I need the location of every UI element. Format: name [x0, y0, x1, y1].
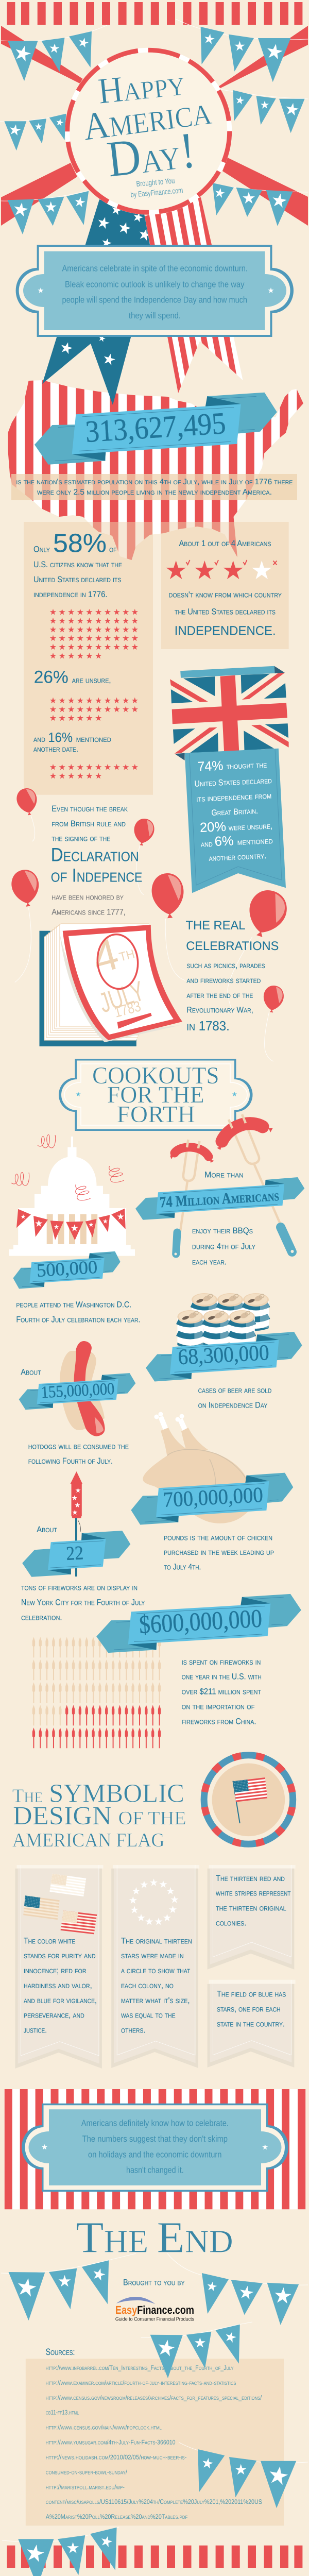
58 percent text: 58%: [53, 529, 107, 558]
26 percent text: 26%: [34, 668, 68, 687]
sources heading: Sources:: [46, 2347, 75, 2357]
star chart 58: [50, 609, 138, 659]
cookouts heading: [92, 1062, 219, 1127]
banner text: United States declared: [194, 776, 272, 789]
banner text: 6%: [214, 833, 234, 849]
symbolic design heading: DESIGN: [13, 1802, 112, 1831]
fireworks text: celebration.: [21, 1613, 62, 1622]
banner text: thought the: [226, 760, 267, 771]
washington text: [16, 1300, 141, 1325]
symbolic design heading: SYMBOLIC: [49, 1780, 184, 1808]
real celebrations text: CELEBRATIONS: [186, 939, 279, 953]
symbolic design heading: [12, 1780, 186, 1851]
calendar date: 4: [87, 929, 124, 983]
color meanings text: and blue for vigilance,: [24, 1996, 97, 2005]
source links: http://www.examiner.com/article/fourth-of-july-interesting-facts-and-statistics: [46, 2379, 236, 2386]
calendar date: 1783: [113, 998, 143, 1021]
turkey: [143, 1412, 252, 1523]
color meanings text: [24, 1937, 97, 2035]
title text: HAPPY: [96, 63, 187, 112]
brought to you: by EasyFinance.com: [130, 186, 183, 199]
panel: 1 out of 4: INDEPENDENCE.: [175, 624, 276, 638]
closing bunting: [1, 2253, 308, 2338]
16 percent text: 16%: [48, 730, 73, 745]
three flags: [23, 1874, 97, 1934]
source links: content/misc/usapolls/US110615/July%204th/Complete%20July%201,%202011%20US: [46, 2498, 262, 2505]
banner text: [194, 758, 273, 863]
source links: consumed-on-super-bowl-sunday/: [46, 2468, 127, 2476]
$600,000,000 ribbon: [95, 1593, 303, 1654]
color meanings text: innocence; red for: [24, 1966, 87, 1975]
title badge: [65, 48, 232, 215]
banner: field of blue: [208, 1980, 296, 2067]
bbq text: [192, 1226, 255, 1266]
source links: http://www.census.gov/newsroom/releases/archives/facts_for_features_special_editions/: [46, 2394, 262, 2401]
155,000,000 ribbon: 155,000,000: [41, 1380, 115, 1402]
source links: A%20Marist%20Poll%20Release%20and%20Tables.pdf: [46, 2513, 188, 2520]
striped map of the USA: [8, 380, 303, 560]
16 percent text: mentioned: [76, 735, 111, 744]
banner: color meanings: [15, 1865, 103, 2069]
thirteen stripes text: the thirteen original: [216, 1904, 286, 1913]
hotdog text: hotdogs will be consumed the: [28, 1442, 129, 1451]
bottom bunting: [2, 2443, 308, 2576]
declaration text: of Indepence: [51, 865, 142, 886]
chicken text: purchased in the week leading up: [164, 1548, 274, 1557]
16 percent text: [33, 730, 111, 754]
capitol building: [9, 1134, 135, 1256]
brought to you: Brought to You: [136, 177, 175, 189]
beer text: [198, 1385, 272, 1410]
fireworks spending text: over $211 million spent: [182, 1687, 262, 1697]
star rating: [166, 560, 277, 579]
fireworks spending text: is spent on fireworks in: [182, 1657, 261, 1667]
washington text: people attend the Washington D.C.: [16, 1300, 131, 1310]
blue star ribbon tail: [42, 199, 152, 405]
color meanings text: justice.: [24, 2026, 47, 2035]
panel: 1 out of 4: doesn't know from which country: [169, 590, 282, 599]
EasyFinance logo: [115, 2297, 194, 2322]
calendar date: JULY: [95, 975, 148, 1019]
panel: 1 out of 4: About 1 out of 4 Americans: [179, 539, 271, 548]
source links: http://www.census.gov/main/www/popclock.html: [46, 2424, 162, 2431]
declaration text: have been honored by: [52, 893, 124, 902]
banner text: its independence from: [196, 791, 272, 804]
cookouts heading: FORTH: [117, 1101, 195, 1127]
real celebrations text: such as picnics, parades: [186, 961, 265, 970]
original stars text: others.: [121, 2026, 145, 2035]
source links: http://maristpoll.marist.edu/wp-: [46, 2483, 125, 2490]
chicken text: pounds is the amount of chicken: [164, 1533, 272, 1542]
26 percent text: are unsure,: [72, 676, 111, 685]
16 percent text: and: [33, 735, 45, 744]
field of blue text: stars, one for each: [217, 2004, 281, 2013]
color meanings text: perseverance, and: [24, 2011, 84, 2020]
intro text: Bleak economic outlook is unlikely to change the way: [65, 279, 245, 289]
population ribbon: [32, 392, 279, 466]
intro text: people will spend the Independence Day and how much: [62, 295, 247, 305]
source links: cb11-ff13.html: [46, 2409, 79, 2416]
cookouts heading: COOKOUTS: [92, 1062, 219, 1089]
fireworks spending text: one year in the U.S. with: [182, 1672, 262, 1682]
beer text: cases of beer are sold: [198, 1385, 272, 1395]
calendar date: [87, 929, 148, 1021]
cookouts heading box: [59, 1059, 252, 1131]
about text (fireworks): About: [37, 1525, 58, 1534]
hotdog text: [28, 1442, 129, 1466]
closing striped band: [5, 2089, 305, 2209]
symbolic design heading: AMERICAN FLAG: [12, 1829, 165, 1851]
$600,000,000 ribbon: $600,000,000: [139, 1604, 263, 1639]
beer cans: [177, 1293, 269, 1348]
68,300,000 ribbon: 68,300,000: [177, 1341, 270, 1369]
real celebrations text: and fireworks started: [186, 976, 261, 985]
hanging blue banner: [185, 749, 286, 893]
closing box: [22, 2104, 288, 2192]
original stars text: The original thirteen: [121, 1937, 192, 1946]
fireworks text: New York City for the Fourth of July: [21, 1598, 145, 1607]
source links: http://news.holidash.com/2010/02/05/how-much-beer-is-: [46, 2453, 186, 2461]
declaration text: from British rule and: [52, 819, 126, 828]
beer text: on Independence Day: [198, 1400, 267, 1410]
declaration text: Americans since 1777,: [52, 908, 126, 917]
population text band: were only 2.5 million people living in the newly independent America.: [37, 488, 272, 497]
closing text: Americans definitely know how to celebrate.: [81, 2119, 229, 2128]
symbolic design heading: OF THE: [118, 1808, 186, 1829]
fireworks text: [21, 1583, 145, 1622]
star chart 16: [50, 764, 138, 779]
banner text: and: [200, 839, 213, 849]
real celebrations text: Revolutionary War,: [186, 1006, 253, 1015]
panel: 58 percent: [24, 522, 153, 795]
original stars text: stars were made in: [121, 1951, 184, 1960]
bbq text: enjoy their BBQs: [192, 1226, 253, 1235]
banner text: Great Britain.: [211, 806, 258, 818]
22 ribbon: [22, 1531, 130, 1577]
thirteen stripes text: [216, 1874, 291, 1927]
us flag on pole: [233, 1777, 267, 1823]
symbolic design heading: THE: [12, 1786, 43, 1807]
population ribbon: 313,627,495: [84, 406, 227, 449]
original stars text: matter what it's size,: [121, 1996, 190, 2005]
color meanings text: stands for purity and: [24, 1951, 96, 1960]
panel: 1 out of 4: [161, 522, 289, 649]
flag badge: [204, 1755, 293, 1844]
original stars text: each colony, no: [121, 1981, 174, 1990]
source links: [46, 2364, 262, 2520]
panel: 1 out of 4: the United States declared its: [175, 607, 276, 617]
74 million ribbon: 74 Million Americans: [159, 1187, 280, 1211]
hotdog: [60, 1341, 105, 1436]
58 percent text: independence in 1776.: [33, 590, 108, 599]
bottom stripes: [7, 2546, 302, 2568]
balloons: [10, 787, 291, 1061]
fireworks spending text: on the importation of: [182, 1702, 254, 1711]
bbq text: during 4th of July: [192, 1242, 255, 1251]
population text band: is the nation's estimated population on this 4th of July, while in July of 1776 there: [16, 478, 293, 486]
field of blue text: state in the country.: [217, 2019, 285, 2028]
color meanings text: The color white: [24, 1937, 75, 1946]
banner text: 74%: [197, 758, 224, 774]
16 percent text: another date.: [33, 744, 78, 754]
declaration text: [51, 804, 142, 917]
rocket pictogram chart: [32, 1637, 161, 1748]
thirteen stripes text: colonies.: [216, 1918, 246, 1927]
grill forks with sausages: [170, 1114, 294, 1255]
fireworks text: tons of fireworks are on display in: [21, 1583, 138, 1592]
washington text: Fourth of July celebration each year.: [16, 1315, 141, 1325]
banner text: another country.: [209, 851, 266, 863]
58 percent text: U.S. citizens know that the: [33, 560, 122, 569]
union jack flag: [170, 666, 289, 760]
closing text: on holidays and the economic downturn: [88, 2149, 221, 2159]
calendar date: TH: [118, 947, 136, 964]
real celebrations text: after the end of the: [186, 991, 253, 1000]
real celebrations text: in 1783.: [186, 1018, 230, 1033]
confetti: [11, 1134, 124, 1202]
500,000 ribbon: 500,000: [36, 1257, 98, 1281]
EasyFinance logo: Guide to Consumer Financial Products: [115, 2316, 194, 2322]
real celebrations text: [185, 919, 279, 1033]
700,000,000 ribbon: [130, 1472, 295, 1526]
bunting over sources: [150, 2325, 240, 2378]
declaration text: the signing of the: [52, 834, 110, 843]
intro text: Americans celebrate in spite of the economic downturn.: [62, 264, 248, 274]
intro text: they will spend.: [129, 311, 181, 320]
star chart 26: [50, 698, 138, 721]
22 ribbon: 22: [65, 1542, 84, 1565]
700,000,000 ribbon: 700,000,000: [163, 1483, 264, 1512]
top stripes: [7, 2, 302, 25]
thirteen stripes text: The thirteen red and: [216, 1874, 285, 1883]
title text: AMERICA: [80, 89, 214, 149]
155,000,000 ribbon: [18, 1372, 136, 1410]
banner text: mentioned: [237, 836, 273, 847]
banner text: 20%: [199, 819, 227, 835]
thirteen stripes text: white stripes represent: [216, 1889, 291, 1898]
closing text: hasn't changed it.: [126, 2165, 184, 2175]
intro text: [62, 264, 248, 320]
500,000 ribbon: [12, 1251, 122, 1289]
real celebrations text: THE REAL: [185, 919, 245, 933]
more than text: More than: [204, 1171, 244, 1180]
cookouts heading: FOR THE: [107, 1081, 204, 1108]
red sun rays: [1, 26, 308, 226]
sources panel: [26, 2359, 284, 2526]
field of blue text: [217, 1990, 286, 2028]
58 percent text: of: [109, 545, 116, 554]
bunting: top left, top right, mid, lower: [0, 19, 308, 234]
original stars text: was equal to the: [121, 2011, 176, 2020]
original stars text: [121, 1937, 192, 2035]
original stars text: a circle to show that: [121, 1966, 191, 1975]
about text (hotdogs): About: [21, 1367, 41, 1377]
source links: http://www.yumsugar.com/4th-July-Fun-Facts-366010: [46, 2439, 176, 2446]
capitol bunting: [16, 1209, 126, 1240]
field of blue text: The field of blue has: [217, 1990, 286, 1999]
banner: thirteen stripes: [208, 1865, 296, 1970]
firework rocket: [71, 1471, 82, 1577]
banner: original stars: [111, 1865, 199, 2068]
title text: [80, 63, 214, 188]
color meanings text: hardiness and valor,: [24, 1981, 92, 1990]
intro box: [16, 245, 294, 337]
brought to you by: Brought to you by: [123, 2278, 185, 2287]
sausages: [170, 1114, 273, 1163]
banner text: were unsure,: [228, 821, 272, 833]
ring of thirteen stars: [129, 1878, 179, 1925]
58 percent text: Only: [33, 545, 50, 554]
EasyFinance logo: EasyFinance.com: [115, 2303, 194, 2316]
the end heading: THE END: [76, 2213, 233, 2262]
chicken text: [164, 1533, 274, 1572]
closing text: The numbers suggest that they don't skimp: [82, 2134, 228, 2144]
closing text: [81, 2119, 229, 2175]
title text: DAY!: [104, 121, 198, 188]
red striped ribbon tail: [145, 197, 243, 393]
fireworks spending text: fireworks from China.: [182, 1717, 256, 1726]
hotdog text: following Fourth of July.: [28, 1456, 113, 1466]
brought to you: [130, 177, 183, 199]
26 percent text: [34, 668, 111, 687]
calendar: [39, 924, 182, 1046]
chicken text: to July 4th.: [164, 1563, 201, 1572]
declaration text: Declaration: [51, 844, 139, 866]
58 percent text: United States declared its: [33, 575, 121, 584]
58 percent text: [33, 529, 122, 599]
source links: http://www.infobarrel.com/Ten_Interesting_Facts_About_the_Fourth_of_July: [46, 2364, 234, 2371]
fireworks spending text: [182, 1657, 262, 1726]
population text band: [11, 474, 297, 500]
68,300,000 ribbon: [144, 1331, 303, 1382]
bbq text: each year.: [192, 1257, 227, 1266]
declaration text: Even though the break: [52, 804, 128, 814]
74 million ribbon: [135, 1177, 304, 1220]
